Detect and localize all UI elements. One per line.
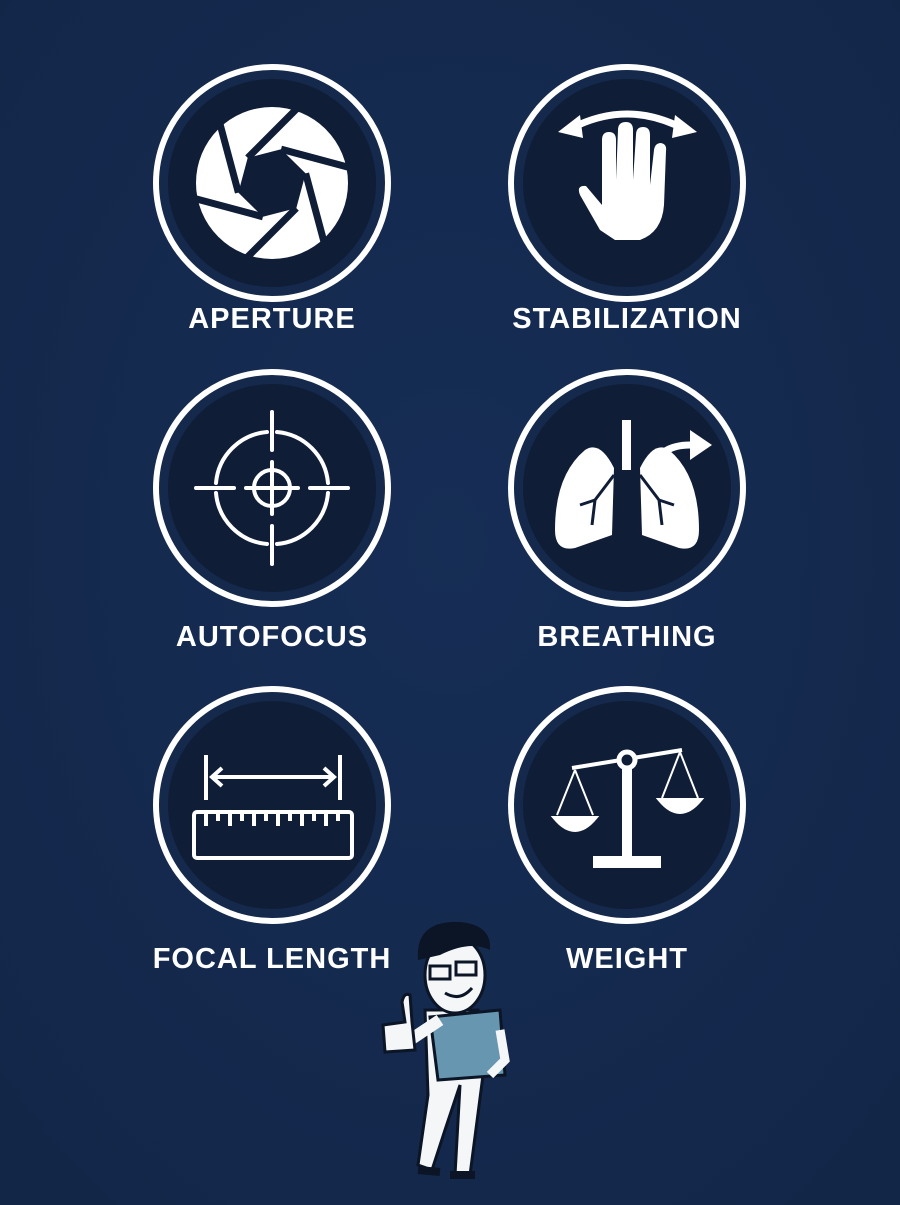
label: weight: WEIGHT	[566, 943, 688, 975]
label: stabilization: STABILIZATION	[512, 303, 742, 335]
label: autofocus: AUTOFOCUS	[176, 621, 368, 653]
label: aperture: APERTURE	[188, 303, 356, 335]
icon: weight	[511, 689, 743, 921]
character	[383, 922, 505, 1175]
icon: aperture	[156, 67, 388, 299]
icon: autofocus	[156, 372, 388, 604]
icon: stabilization	[511, 67, 743, 299]
label: focal length: FOCAL LENGTH	[153, 943, 391, 975]
icon: focal length	[156, 689, 388, 921]
label: breathing: BREATHING	[537, 621, 717, 653]
icon: breathing	[511, 372, 743, 604]
